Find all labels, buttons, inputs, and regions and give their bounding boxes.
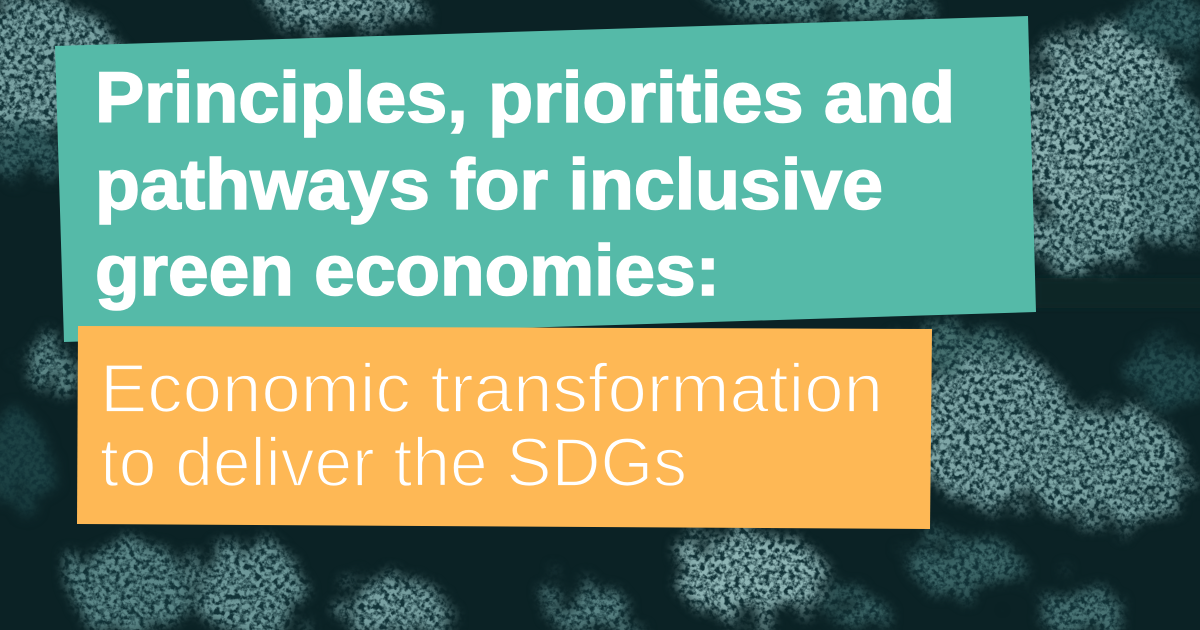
title text: pathways for inclusive [95, 146, 883, 225]
title text: green economies: [95, 232, 720, 311]
subtitle text: Economic transformation [100, 350, 883, 427]
road strip [1036, 278, 1200, 308]
subtitle panel: orange banner [77, 326, 932, 529]
title panel: teal banner [55, 16, 1036, 342]
title text: Principles, priorities and [95, 59, 955, 138]
subtitle text: to deliver the SDGs [100, 424, 687, 501]
